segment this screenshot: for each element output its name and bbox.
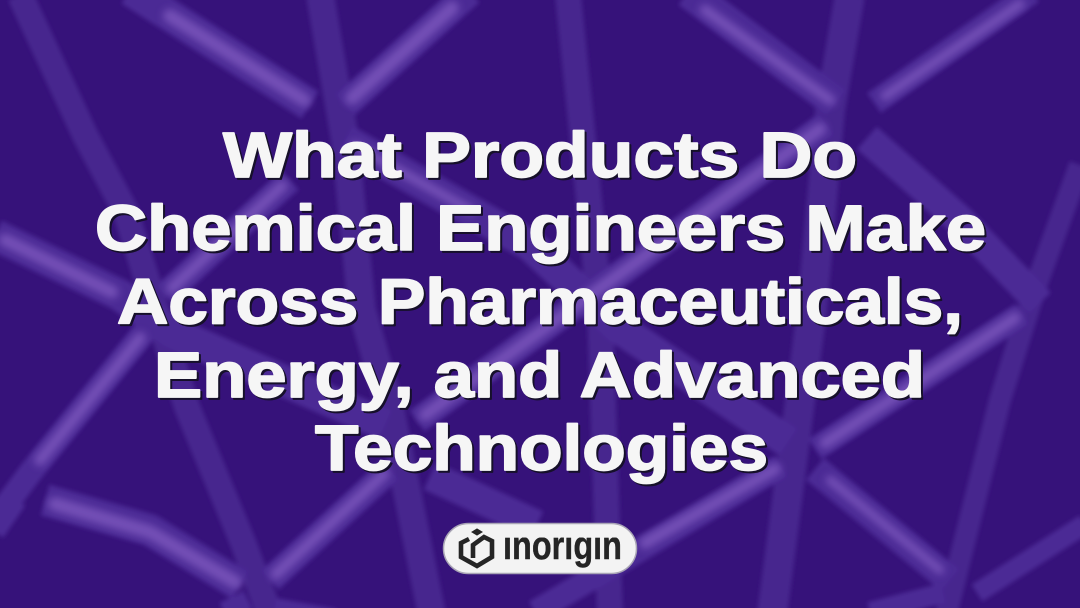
title (95, 119, 986, 484)
title: Technologies (315, 412, 768, 484)
title: Chemical Engineers Make (95, 192, 986, 264)
title: Across Pharmaceuticals, (117, 266, 963, 338)
title: Energy, and Advanced (154, 339, 925, 411)
icon: hexagonal cube logo mark (461, 529, 492, 566)
title: What Products Do (223, 119, 857, 191)
logo badge (444, 524, 636, 574)
logo wordmark: inorigin (503, 524, 622, 568)
